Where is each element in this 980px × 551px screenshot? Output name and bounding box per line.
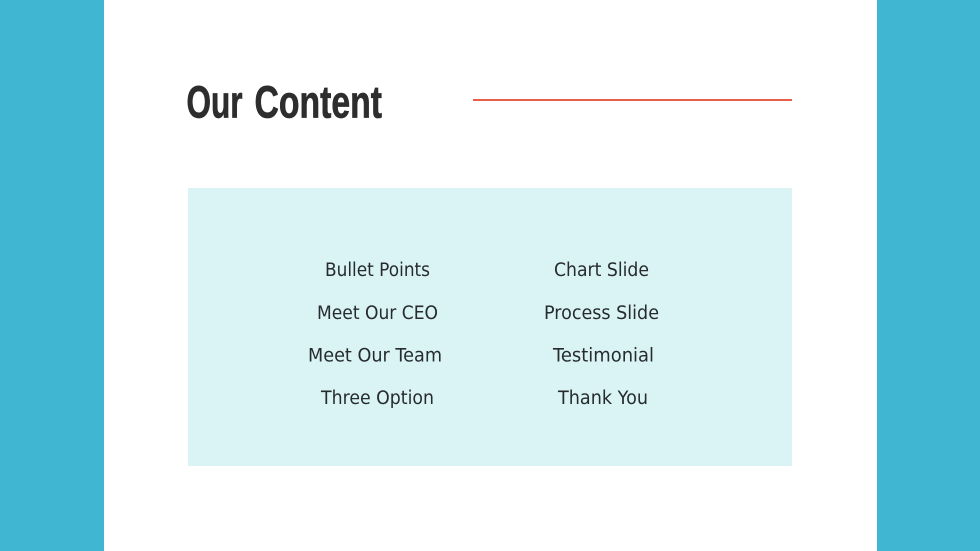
accent line <box>473 99 792 101</box>
title: Content <box>254 76 382 127</box>
title <box>186 76 382 127</box>
list item: Process Slide: Process Slide <box>544 303 659 324</box>
list item: Meet Our CEO: Meet Our CEO <box>317 303 438 324</box>
list item: Testimonial: Testimonial <box>552 346 654 366</box>
title: Our <box>186 76 243 127</box>
left side band <box>0 0 104 551</box>
list item: Chart Slide: Chart Slide <box>554 260 649 281</box>
list item: Meet Our Team: Meet Our Team <box>308 346 442 366</box>
list item: Thank You: Thank You <box>557 388 648 409</box>
list item: Bullet Points: Bullet Points <box>325 260 430 281</box>
list item: Three Option: Three Option <box>320 388 434 409</box>
right side band <box>877 0 980 551</box>
panel: content list <box>188 188 792 466</box>
